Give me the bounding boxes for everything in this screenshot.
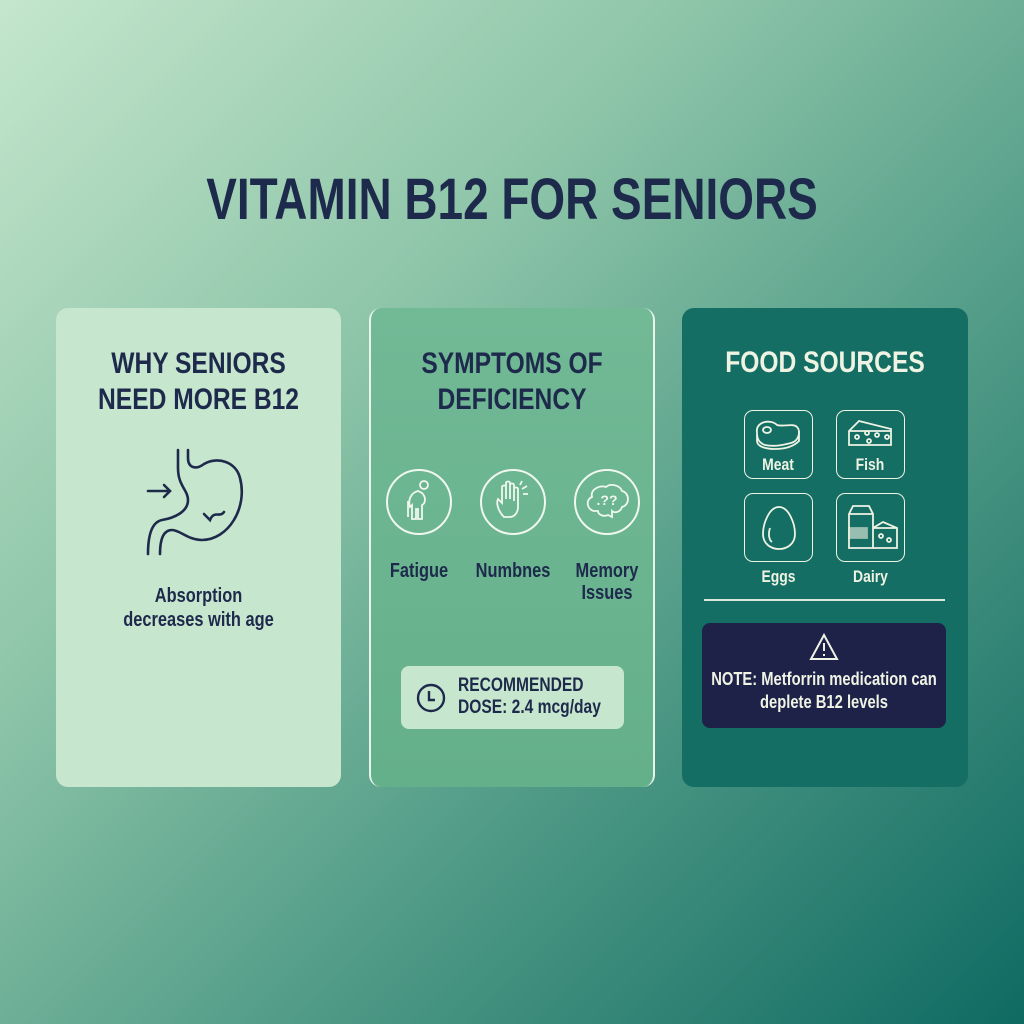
icon: numbness bbox=[480, 469, 546, 535]
text: dose: DOSE: 2.4 mcg/day bbox=[458, 697, 601, 718]
text: note: NOTE: Metforrin medication can bbox=[711, 669, 937, 689]
label: fish: Fish bbox=[856, 455, 884, 474]
icon: meat bbox=[744, 410, 813, 479]
label: fatigue: Fatigue bbox=[390, 560, 448, 582]
divider bbox=[704, 599, 945, 601]
icon: egg bbox=[744, 493, 813, 562]
label: meat: Meat bbox=[762, 455, 794, 474]
heading: symptoms: SYMPTOMS OF bbox=[421, 347, 603, 380]
callout: metformin note bbox=[702, 623, 946, 728]
text: dose: RECOMMENDED bbox=[458, 675, 584, 696]
panel: why seniors bbox=[56, 308, 341, 787]
text: note bbox=[711, 669, 937, 712]
heading: why seniors: WHY SENIORS bbox=[111, 347, 286, 380]
heading: symptoms: DEFICIENCY bbox=[438, 383, 586, 416]
icon: memory bbox=[574, 469, 640, 535]
label: memory: Memory bbox=[576, 560, 638, 582]
text: dose bbox=[458, 675, 601, 718]
label: numbness: Numbnes bbox=[476, 560, 550, 582]
text: note: deplete B12 levels bbox=[760, 692, 888, 712]
panel: symptoms bbox=[369, 308, 655, 787]
label: memory: Issues bbox=[581, 582, 633, 604]
icon: clock bbox=[416, 684, 446, 712]
label: memory bbox=[576, 560, 638, 604]
heading: food sources: FOOD SOURCES bbox=[725, 346, 925, 379]
heading: why seniors bbox=[98, 347, 299, 416]
icon: fatigue bbox=[386, 469, 452, 535]
text: absorption bbox=[123, 585, 274, 631]
label: eggs: Eggs bbox=[761, 567, 796, 586]
heading: why seniors: NEED MORE B12 bbox=[98, 383, 299, 416]
icon: dairy bbox=[836, 493, 905, 562]
icon: stomach bbox=[146, 448, 244, 556]
text: absorption: decreases with age bbox=[123, 609, 274, 631]
label: dairy: Dairy bbox=[853, 567, 888, 586]
panel: food sources bbox=[682, 308, 968, 787]
text: absorption: Absorption bbox=[155, 585, 242, 607]
title: VITAMIN B12 FOR SENIORS bbox=[206, 165, 818, 232]
icon: fish (cheese glyph) bbox=[836, 410, 905, 479]
icon: memory: .?? bbox=[596, 492, 618, 508]
icon: warning bbox=[809, 633, 839, 660]
callout: dose bbox=[401, 666, 624, 729]
heading: symptoms bbox=[421, 347, 603, 416]
